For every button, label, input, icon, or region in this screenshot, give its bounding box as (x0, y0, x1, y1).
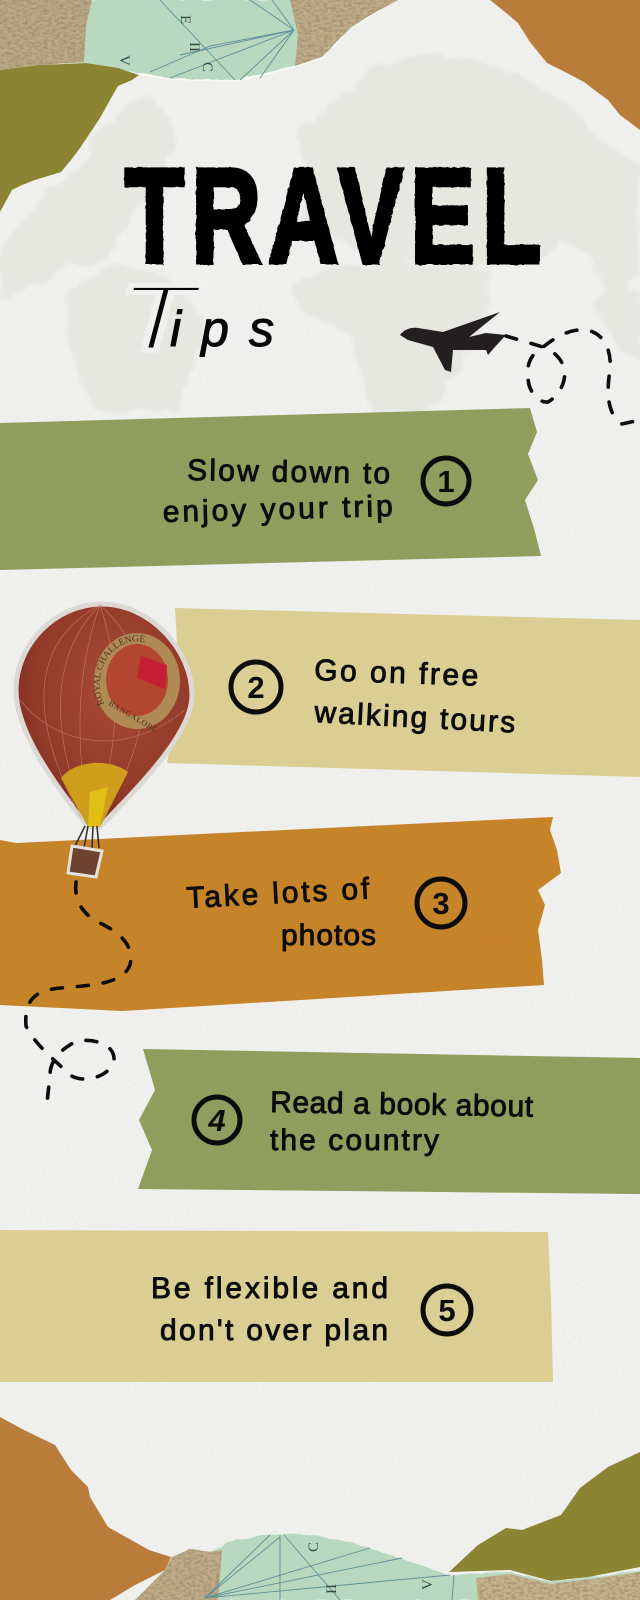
torn map bottom: V (420, 1579, 436, 1590)
tip 5 text: don't over plan (160, 1314, 388, 1347)
subtitle: Tips: T (118, 265, 203, 370)
sponsor badge (94, 633, 180, 734)
band 3: orange (0, 810, 565, 1015)
torn map bottom (135, 1534, 640, 1600)
number 1: 1 (437, 464, 455, 499)
dashed balloon path (26, 882, 131, 1112)
map land left (135, 1548, 225, 1600)
band 2: khaki (160, 600, 640, 780)
subtitle: Tips: ips (170, 301, 274, 357)
faint world map (0, 55, 640, 414)
torn map top: II (186, 42, 202, 52)
number 2: 2 (247, 670, 265, 705)
tip 5 text: Be flexible and (151, 1272, 388, 1305)
number 2 (231, 662, 281, 712)
orange torn corner top right (490, 0, 640, 130)
number 3 (417, 879, 465, 927)
tip 5 text (151, 1272, 388, 1347)
title: Travel: TRAVEL (125, 140, 541, 291)
tip 3 text: Take lots of (186, 872, 371, 915)
number 3: 3 (432, 886, 450, 921)
number 4: 4 (207, 1103, 226, 1138)
balloon envelope (16, 604, 192, 827)
tip 1 text: Slow down to (187, 454, 390, 491)
number 5 (423, 1286, 471, 1334)
band 5: khaki (0, 1228, 555, 1384)
tip 4 text: Read a book about (270, 1086, 534, 1124)
tip 4 text: the country (270, 1124, 439, 1157)
tip 3 text (186, 872, 376, 952)
torn map top: V (116, 55, 132, 66)
torn map top: E (177, 15, 193, 24)
icon: airplane (400, 312, 506, 372)
subtitle: Tips (118, 265, 274, 370)
tip 2 text: walking tours (313, 696, 516, 740)
tip 4 text (270, 1086, 534, 1157)
basket (68, 826, 102, 877)
torn map bottom: II (324, 1584, 340, 1594)
tip 3 text: photos (281, 919, 376, 952)
torn map top (0, 0, 400, 82)
torn map top: C (199, 62, 215, 72)
tip 2 text: Go on free (314, 654, 479, 693)
orange torn corner bottom left (0, 1417, 171, 1600)
sponsor badge: ROYAL CHALLENGE (94, 635, 145, 706)
map land right (475, 1570, 640, 1600)
number 4 (194, 1097, 240, 1143)
torn map bottom: C (306, 1542, 322, 1552)
map land left (0, 0, 95, 72)
olive torn corner bottom right (449, 1452, 640, 1581)
number 5: 5 (438, 1293, 456, 1328)
band 4: green (135, 1045, 640, 1197)
olive torn corner top left (0, 63, 139, 212)
dashed flight path (506, 330, 640, 424)
tip 2 text (313, 654, 516, 740)
tip 1 text: enjoy your trip (162, 490, 393, 529)
number 1 (423, 458, 469, 504)
yellow skirt (61, 763, 128, 827)
sponsor badge: BANGALORE (107, 699, 159, 734)
band 1: green (0, 400, 545, 572)
map land right (288, 0, 400, 68)
tip 1 text (162, 454, 393, 529)
hot air balloon (14, 602, 194, 879)
